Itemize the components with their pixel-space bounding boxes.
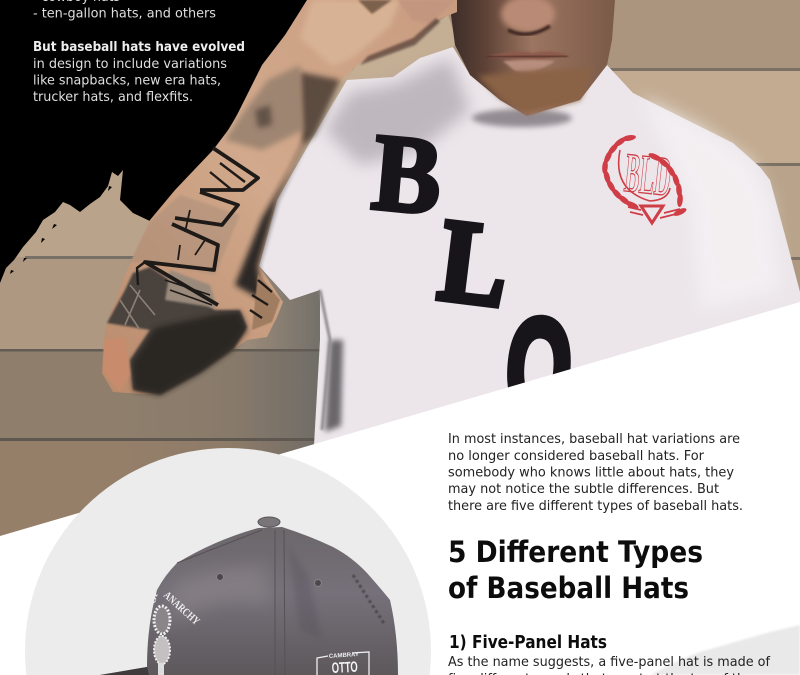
hat seams [177, 530, 285, 675]
tattoo chevrons [120, 148, 272, 330]
section: five-panel hats [448, 632, 771, 675]
photo: man in white t-shirt [102, 0, 800, 449]
lower tattoo [107, 267, 247, 395]
hat highlights [172, 565, 268, 625]
t-shirt [259, 47, 800, 445]
body text: As the name suggests, a five-panel hat is made of [448, 654, 771, 670]
face: nose, lips and beard [449, 0, 615, 116]
top-left intro text [33, 0, 245, 105]
hat embroidery: skull logo [147, 589, 202, 675]
black brush shape [0, 0, 320, 283]
hat top button [258, 517, 280, 527]
hat embroidery: skull logo: ANARCHY [161, 589, 202, 628]
hat eyelets [216, 574, 322, 586]
red laurel emblem [602, 134, 688, 223]
wall gap between hand and shirt [345, 15, 458, 82]
hat illustration [100, 517, 398, 675]
top-left intro text: But baseball hats have evolved [33, 39, 245, 55]
paragraph: hat variations: there are five different types of baseball hats. [448, 498, 743, 514]
grey brush shape, bottom right [650, 625, 800, 675]
grey circle behind hat [25, 448, 431, 675]
brush edge specks [10, 186, 112, 274]
hand highlights [300, 0, 400, 66]
paragraph: hat variations: In most instances, baseball hat variations are [448, 431, 740, 447]
top-left intro text: like snapbacks, new era hats, [33, 72, 221, 88]
paragraph: hat variations: somebody who knows little about hats, they [448, 464, 734, 480]
paragraph: hat variations: may not notice the subtle differences. But [448, 481, 719, 497]
heading: 5 Different Types of Baseball Hats: 5 Different Types [448, 535, 703, 569]
shirt letters BLO [368, 111, 577, 449]
hat embroidery: skull logo: OF [147, 589, 160, 605]
hat patch text [317, 652, 369, 675]
top-left intro text: - ten-gallon hats, and others [33, 6, 216, 22]
top-left intro text: trucker hats, and flexfits. [33, 89, 193, 105]
tattooed arm and hand [102, 0, 457, 395]
forearm tattoo shading [235, 133, 310, 300]
heading: 5 Different Types of Baseball Hats [448, 535, 703, 605]
upper-arm stripes [252, 274, 280, 330]
paragraph: hat variations: no longer considered baseball hats. For [448, 448, 704, 464]
subheading: 1) Five-Panel Hats [449, 632, 607, 653]
shirt letters BLO: L [433, 194, 516, 332]
paragraph: hat variations [448, 431, 743, 514]
photo: wood plank wall [0, 0, 800, 540]
red laurel emblem: BLD [622, 142, 674, 209]
shirt letters BLO: O [501, 288, 577, 449]
top-left intro text: in design to include variations [33, 56, 227, 72]
shirt letters BLO: B [368, 111, 447, 239]
hat brim [100, 667, 149, 675]
white diagonal content panel [0, 302, 800, 675]
heading: 5 Different Types of Baseball Hats: of Baseball Hats [448, 571, 689, 605]
hat patch text: CAMBRAY [329, 652, 359, 660]
